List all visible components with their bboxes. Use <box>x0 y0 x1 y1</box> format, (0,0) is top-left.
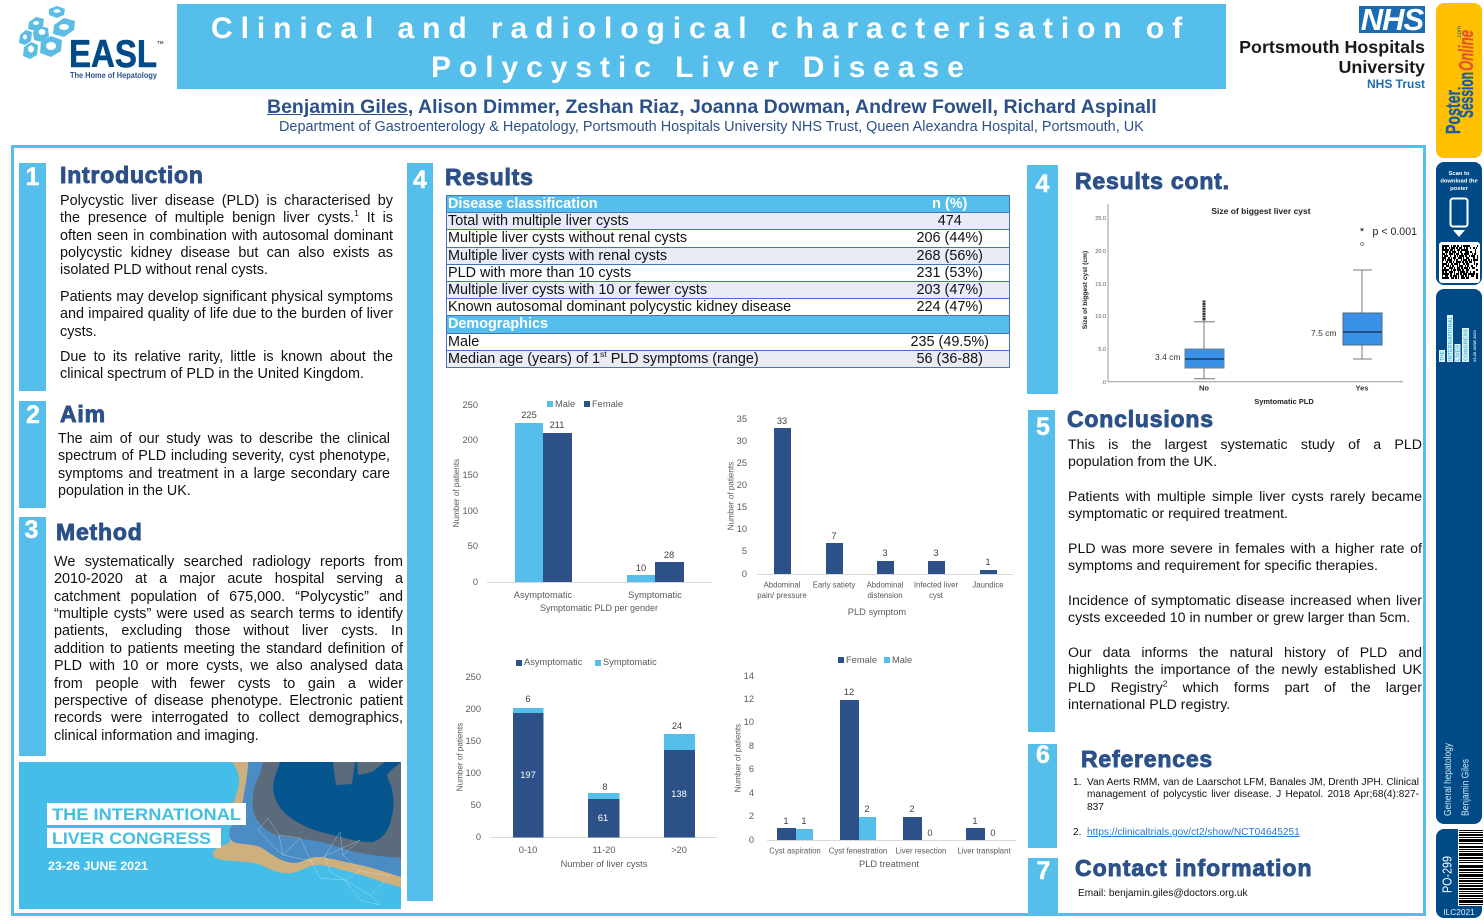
table: disease classification and demographics: PLD with more than 10 cysts <box>448 265 631 281</box>
data labels <box>783 687 996 838</box>
section number 1: 1 <box>26 163 39 191</box>
legend: Male <box>555 399 575 409</box>
data labels: 33 <box>777 416 787 426</box>
category labels: Early satiety <box>813 580 855 590</box>
category labels <box>519 845 687 855</box>
legend: Female <box>846 655 877 665</box>
reference 2: 2. <box>1073 827 1081 838</box>
text: conclusion 5 <box>1068 645 1422 713</box>
category labels: Jaundice <box>972 580 1004 590</box>
y axis labels: 15 <box>737 502 747 512</box>
y axis labels: 250 <box>465 672 481 682</box>
NHS badge: NHS <box>1361 2 1423 37</box>
y axis labels: 25 <box>737 458 747 468</box>
word Session: Session <box>1456 72 1478 118</box>
data labels: 28 <box>664 550 674 560</box>
category labels: Yes <box>1356 384 1368 392</box>
mini congress logo <box>1439 315 1477 362</box>
table: disease classification and demographics: 474 <box>938 213 962 229</box>
data labels: 12 <box>844 687 854 697</box>
y axis labels <box>1095 216 1106 386</box>
box: no <box>1185 300 1224 379</box>
box plot: size of biggest liver cyst <box>1082 204 1417 406</box>
presenter name: Benjamin Giles <box>1460 759 1472 816</box>
p value: p < 0.001 <box>1372 226 1417 238</box>
title line 1: Clinical and radiological characterisation of <box>211 12 1190 45</box>
mini congress logo: INTERNATIONAL <box>1448 315 1454 361</box>
section bar <box>1028 858 1058 913</box>
x axis title: Number of liver cysts <box>561 859 648 869</box>
text: intro paragraph 1: polycystic kidney disease but can also exists as <box>60 245 393 261</box>
trust name: University <box>1338 56 1425 76</box>
table: disease classification and demographics <box>446 195 1010 368</box>
legend <box>838 655 912 665</box>
data labels: 7 <box>831 531 837 541</box>
data labels: 0 <box>927 828 933 838</box>
y axis labels: 12 <box>744 694 754 704</box>
table: disease classification and demographics: Total with multiple liver cysts <box>448 213 629 229</box>
text: conclusion 3: PLD was more severe in females with a higher rate of <box>1068 541 1422 557</box>
affiliation: Department of Gastroenterology & Hepatology, Portsmouth Hospitals University NHS Trust, Queen Alexandra Hospital, Portsmouth, UK <box>279 119 1144 135</box>
sidebar: Poster Session Online badge <box>1436 3 1482 158</box>
category labels <box>769 846 1011 856</box>
text: intro paragraph 2 <box>60 289 393 340</box>
y axis labels: .0 <box>1101 380 1106 386</box>
section bar <box>1028 744 1057 848</box>
data labels: 138 <box>671 789 687 799</box>
data labels: 1 <box>783 816 789 826</box>
reference 1: 837 <box>1087 802 1104 813</box>
data labels: 0 <box>990 828 996 838</box>
panel: conclusions <box>1028 406 1422 732</box>
section number 6: 6 <box>1036 741 1050 769</box>
logo tagline: The Home of Hepatology <box>70 71 158 80</box>
text: conclusion 4: Incidence of symptomatic disease increased when liver <box>1068 593 1422 609</box>
legend: Symptomatic <box>603 657 657 667</box>
y axis labels: 14 <box>744 671 754 681</box>
trust name <box>1239 37 1425 76</box>
text: conclusion 4 <box>1068 593 1422 626</box>
scan instruction: Scan to <box>1449 171 1470 177</box>
table: disease classification and demographics: Demographics <box>448 316 548 332</box>
NHS Trust: NHS Trust <box>1367 77 1425 91</box>
significance star: * <box>1360 226 1365 238</box>
y axis labels: 150 <box>462 470 478 480</box>
network lines <box>258 818 390 905</box>
x axis title: Symtomatic PLD <box>1254 397 1314 406</box>
legend: Male <box>892 655 912 665</box>
x axis title: Symptomatic PLD per gender <box>540 603 658 613</box>
text: aim: population in the UK. <box>58 483 191 499</box>
frame: main content border <box>11 145 1426 916</box>
data labels: 3 <box>882 548 888 558</box>
category labels: 11-20 <box>592 845 616 855</box>
data labels <box>520 694 687 823</box>
y axis labels: 150 <box>465 736 481 746</box>
scan instruction <box>1440 171 1478 192</box>
bars <box>777 700 985 840</box>
session topic: General hepatology <box>1443 743 1454 816</box>
section number 4: 4 <box>413 166 427 194</box>
stacked bar chart: number of liver cysts <box>456 657 717 869</box>
data labels: 2 <box>909 804 915 814</box>
category labels: Abdominal <box>764 580 801 590</box>
mini congress logo: THE <box>1440 351 1446 361</box>
icon: phone <box>1450 198 1468 237</box>
panel: results continued <box>1027 165 1417 406</box>
y axis labels: 5.0 <box>1098 347 1106 353</box>
text: intro paragraph 3 <box>60 349 393 382</box>
panel: results <box>407 163 1016 901</box>
heading: Contact information: Contact information <box>1075 855 1312 881</box>
y axis labels: 8 <box>749 741 754 751</box>
logo: NHS Portsmouth <box>1239 2 1425 91</box>
y axis labels: 10.0 <box>1095 314 1106 320</box>
reference 1 <box>1073 777 1419 813</box>
text: conclusion 2: Patients with multiple simple liver cysts rarely became <box>1068 489 1422 505</box>
data labels: 24 <box>672 721 682 731</box>
table: disease classification and demographics: 206 (44%) <box>917 230 983 246</box>
y axis labels <box>462 400 478 587</box>
heading: Conclusions: Conclusions <box>1067 406 1214 432</box>
table: disease classification and demographics: 235 (49.5%) <box>911 334 989 350</box>
median label yes: 7.5 cm <box>1311 328 1337 338</box>
panel: contact information <box>1028 855 1312 913</box>
title line 2: Polycystic Liver Disease <box>431 51 972 84</box>
text: method: We systematically searched radiology reports from <box>54 554 403 570</box>
scan instruction: poster <box>1450 186 1469 192</box>
text: intro paragraph 1: isolated PLD without renal cysts. <box>60 262 268 278</box>
sidebar: scan QR panel <box>1436 162 1482 285</box>
text: conclusion 4: cysts exceeded 10 in number or grew larger than 5cm. <box>1068 610 1410 626</box>
category labels <box>757 580 1004 600</box>
data labels: 1 <box>985 557 991 567</box>
category labels: Symptomatic <box>628 590 682 600</box>
data labels <box>521 410 674 573</box>
reference 1: 1. <box>1073 777 1081 788</box>
data labels: 225 <box>521 410 537 420</box>
logo: EASL <box>19 6 164 80</box>
icon: hexagon cluster <box>19 6 75 59</box>
y axis labels: 35 <box>737 414 747 424</box>
y axis labels: 10 <box>737 524 747 534</box>
text: aim: spectrum of PLD including severity, cyst phenotype, <box>58 448 390 464</box>
data labels: 6 <box>525 694 531 704</box>
data labels: 61 <box>598 813 608 823</box>
category labels <box>1199 384 1368 392</box>
legend: Female <box>592 399 623 409</box>
text: conclusion 2: symptomatic or required treatment. <box>1068 506 1288 522</box>
stacked bars <box>513 708 695 838</box>
y axis labels: 200 <box>465 704 481 714</box>
congress name: line 2: LIVER CONGRESS <box>52 829 211 848</box>
y axis labels: 0 <box>742 569 747 579</box>
text: method: PLD with 10 or more cysts, we also analysed data <box>54 658 403 674</box>
category labels <box>514 590 682 600</box>
y axis labels: 0 <box>476 832 481 842</box>
y axis labels: 50 <box>471 800 481 810</box>
y axis labels: 100 <box>462 506 478 516</box>
text: conclusion 1: population from the UK. <box>1068 454 1217 470</box>
table: disease classification and demographics: 224 (47%) <box>917 299 983 315</box>
heading: Method: Method <box>56 519 143 545</box>
QR code <box>1439 242 1480 283</box>
bar chart: PLD symptom <box>726 414 1013 617</box>
table: disease classification and demographics: Male <box>448 334 479 350</box>
data labels: 1 <box>972 816 978 826</box>
table: disease classification and demographics: Known autosomal dominant polycystic kidney disease <box>448 299 791 315</box>
y axis labels <box>465 672 481 842</box>
table: disease classification and demographics: Multiple liver cysts with renal cysts <box>448 248 667 264</box>
y axis labels: 0 <box>749 835 754 845</box>
text: intro paragraph 2: and impaired quality of life due to the burden of liver <box>60 306 393 322</box>
category labels: Cyst fenestration <box>829 846 887 856</box>
congress date: 23-26 JUNE 2021 <box>48 861 149 873</box>
title banner <box>177 4 1226 89</box>
authors: Benjamin Giles, Alison Dimmer, Zeshan Riaz, Joanna Dowman, Andrew Fowell, Richard Aspinall <box>267 96 1157 118</box>
mini congress logo: LIVER <box>1456 345 1462 361</box>
suffix .com: .com <box>1457 26 1463 39</box>
panel: introduction <box>19 162 393 391</box>
category labels: Infected liver <box>914 580 958 590</box>
category labels: >20 <box>671 845 687 855</box>
reference 2: https://clinicaltrials.gov/ct2/show/NCT04645251 <box>1087 827 1300 838</box>
bars <box>774 428 997 574</box>
section bar <box>19 517 46 756</box>
heading: Results: Results <box>445 164 534 190</box>
chart title: Size of biggest liver cyst <box>1211 206 1311 216</box>
box: yes <box>1343 243 1382 359</box>
y axis labels: 15.0 <box>1095 282 1106 288</box>
reference 1: Van Aerts RMM, van de Laarschot LFM, Banales JM, Drenth JPH. Clinical <box>1087 777 1419 788</box>
heading: Introduction: Introduction <box>60 162 204 188</box>
section number 4: 4 <box>1036 170 1049 198</box>
bars <box>515 423 684 582</box>
congress name: line 1: THE INTERNATIONAL <box>52 805 241 824</box>
congress code: ILC2021 <box>1443 907 1475 917</box>
data labels: 3 <box>933 548 939 558</box>
y axis title: Number of patients <box>734 724 742 792</box>
section number 3: 3 <box>25 516 38 544</box>
category labels: Liver transplant <box>957 846 1011 856</box>
y axis title: Number of patients <box>452 459 461 527</box>
text: aim <box>58 431 390 499</box>
data labels: 8 <box>602 782 608 792</box>
y axis labels: 50 <box>468 541 478 551</box>
text: method: addition to patients meeting the standard definition of <box>54 641 403 657</box>
y axis labels: 5 <box>742 546 747 556</box>
data labels: 197 <box>520 770 536 780</box>
category labels: Abdominal <box>867 580 904 590</box>
text: intro paragraph 1 <box>60 193 393 278</box>
data labels: 1 <box>801 816 807 826</box>
category labels: pain/ pressure <box>757 591 807 600</box>
y axis labels: 2 <box>749 811 754 821</box>
text: intro paragraph 1: Polycystic liver disease (PLD) is characterised by <box>60 193 393 209</box>
y axis labels: 10 <box>744 717 754 727</box>
mini congress logo: CONGRESS <box>1464 329 1470 361</box>
heading: Aim: Aim <box>60 401 106 427</box>
barcode <box>1458 829 1484 906</box>
text: conclusion 3 <box>1068 541 1422 574</box>
panel: aim <box>19 401 390 508</box>
section bar <box>407 163 433 901</box>
text: method: “multiple cysts” were used as search terms to identify <box>54 606 403 622</box>
trademark: TM <box>157 40 164 45</box>
y axis labels: 4 <box>749 788 754 798</box>
email: Email: benjamin.giles@doctors.org.uk <box>1078 888 1248 899</box>
text: conclusion 5: PLD Registry2 which forms part of the larger <box>1068 678 1422 696</box>
category labels: No <box>1199 384 1209 392</box>
text: method: perspective of disease phenotype. Electronic patient <box>54 693 403 709</box>
median label no: 3.4 cm <box>1155 352 1181 362</box>
scan instruction: download the <box>1440 178 1478 184</box>
word Poster: Poster <box>1443 90 1465 134</box>
text: method: patients, excluding those without liver cysts. In <box>54 623 403 639</box>
category labels: 0-10 <box>519 845 537 855</box>
legend <box>516 657 657 667</box>
y axis title: Size of biggest cyst (cm) <box>1082 251 1089 329</box>
text: method: records were interrogated to collect demographics, <box>54 710 403 726</box>
word Online: Online <box>1456 30 1478 71</box>
sidebar: session panel <box>1436 289 1482 824</box>
bar chart: symptomatic PLD per gender <box>452 399 712 613</box>
sidebar: poster id and barcode <box>1436 829 1483 918</box>
section number 2: 2 <box>26 401 40 429</box>
y axis labels: 250 <box>462 400 478 410</box>
legend <box>547 399 623 409</box>
text: conclusion 3: symptoms and requirement for specific therapies. <box>1068 558 1378 574</box>
text: aim: symptoms and treatment in a large secondary care <box>58 466 390 482</box>
poster number: PO-299 <box>1440 856 1454 893</box>
y axis labels: 0 <box>473 577 478 587</box>
table: disease classification and demographics: n (%) <box>932 196 967 212</box>
legend: Asymptomatic <box>524 657 583 667</box>
y axis title: Number of patients <box>456 723 464 791</box>
heading: References: References <box>1081 746 1213 772</box>
text: conclusion 1: This is the largest systematic study of a PLD <box>1068 437 1422 453</box>
category labels: Liver resection <box>896 846 946 856</box>
text: intro paragraph 3: clinical spectrum of PLD in the United Kingdom. <box>60 366 364 382</box>
data labels: 211 <box>550 420 564 430</box>
y axis labels: 25.0 <box>1095 216 1106 222</box>
text: intro paragraph 2: cysts. <box>60 324 97 340</box>
data labels: 10 <box>636 563 646 573</box>
heading: Results cont.: Results cont. <box>1075 168 1230 194</box>
text: conclusion 5: Our data informs the natural history of PLD and <box>1068 645 1422 661</box>
table: disease classification and demographics: 56 (36-88) <box>917 351 983 367</box>
table: disease classification and demographics: 268 (56%) <box>917 248 983 264</box>
x axis title: PLD symptom <box>848 607 906 617</box>
x axis title: PLD treatment <box>859 859 919 869</box>
text: conclusion 1 <box>1068 437 1422 470</box>
reference 1: management of polycystic liver disease. J Hepatol. 2018 Apr;68(4):827- <box>1087 789 1419 800</box>
text: aim: The aim of our study was to describe the clinical <box>58 431 390 447</box>
y axis labels: 200 <box>462 435 478 445</box>
data labels: 2 <box>864 804 870 814</box>
text: intro paragraph 2: Patients may develop significant physical symptoms <box>60 289 393 305</box>
text: conclusion 5: international PLD registry. <box>1068 697 1230 713</box>
y axis labels: 100 <box>465 768 481 778</box>
y axis labels <box>737 414 747 579</box>
y axis labels <box>744 671 754 845</box>
table: disease classification and demographics: Disease classification <box>448 196 598 212</box>
y axis labels: 20.0 <box>1095 249 1106 255</box>
mini congress logo: 23-26 JUNE 2021 <box>1472 329 1477 362</box>
category labels: Asymptomatic <box>514 590 573 600</box>
image: International Liver Congress banner <box>19 762 401 909</box>
text: method: clinical information and imaging. <box>54 728 259 744</box>
section bar <box>19 401 46 508</box>
y axis labels: 6 <box>749 764 754 774</box>
category labels: distension <box>867 591 903 600</box>
table: disease classification and demographics: 203 (47%) <box>917 282 983 298</box>
panel: method <box>19 516 404 756</box>
text: method: 2010-2020 at a major acute hospital serving a <box>54 571 403 587</box>
table: disease classification and demographics: Multiple liver cysts without renal cysts <box>448 230 687 246</box>
text: method <box>54 554 404 744</box>
text: intro paragraph 1: the presence of multiple benign liver cysts.1 It is <box>60 209 393 226</box>
section bar <box>1028 410 1055 732</box>
logo wordmark: EASL <box>69 33 157 76</box>
category labels: Cyst aspiration <box>769 846 821 856</box>
text: conclusion 2 <box>1068 489 1422 522</box>
bar chart: PLD treatment <box>734 655 1016 869</box>
y axis title: Number of patients <box>726 462 736 530</box>
liver layers artwork <box>213 762 401 887</box>
section number 7: 7 <box>1037 857 1050 885</box>
panel: references <box>1028 741 1419 848</box>
y axis labels: 20 <box>737 480 747 490</box>
table: disease classification and demographics: Multiple liver cysts with 10 or fewer cysts <box>448 282 707 298</box>
section bar <box>19 163 46 391</box>
trust name: Portsmouth Hospitals <box>1239 37 1425 57</box>
table: disease classification and demographics: 231 (53%) <box>917 265 983 281</box>
text: method: catchment population of 675,000. “Polycystic” and <box>54 589 403 605</box>
y axis labels: 30 <box>737 436 747 446</box>
section number 5: 5 <box>1036 413 1050 441</box>
text: intro paragraph 3: Due to its relative rarity, little is known about the <box>60 349 393 365</box>
section bar <box>1027 165 1058 394</box>
category labels: cyst <box>929 591 944 600</box>
text: conclusion 5: highlights the importance of the newly established UK <box>1068 662 1422 678</box>
text: method: from people with fewer cysts to gain a wider <box>54 676 403 692</box>
data labels <box>777 416 991 567</box>
text: intro paragraph 1: often seen in combination with autosomal dominant <box>60 228 393 244</box>
